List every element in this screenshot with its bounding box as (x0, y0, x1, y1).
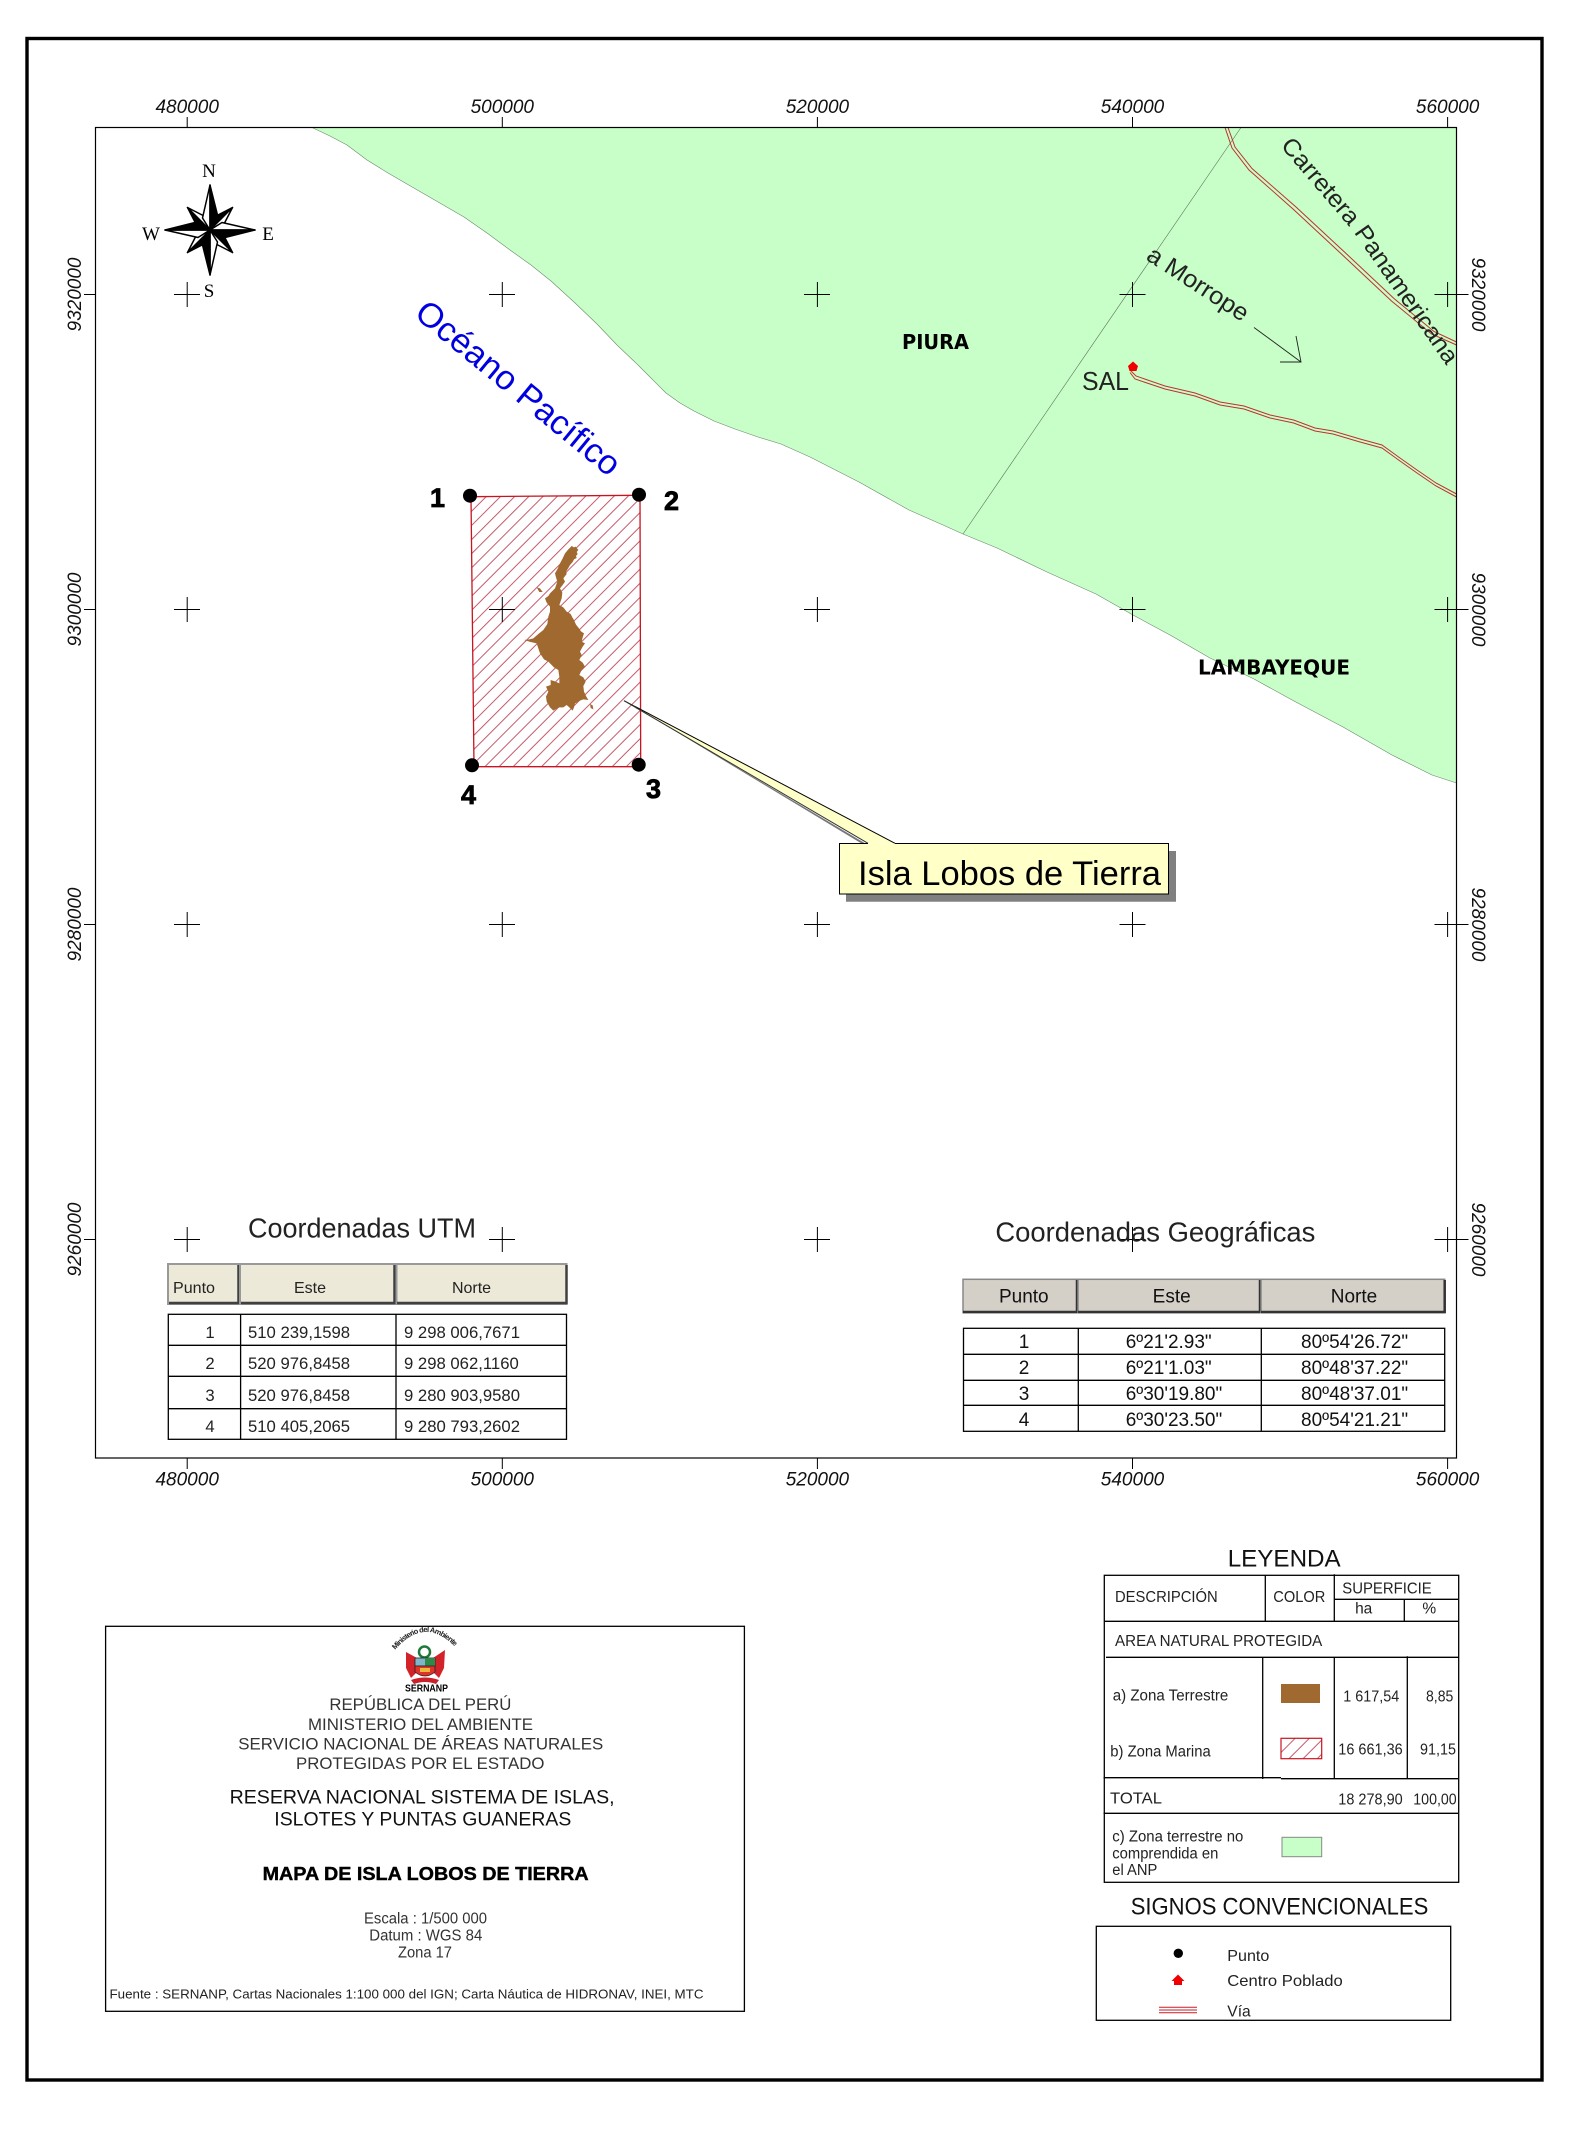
table rows: 6º30'23.50" (1126, 1410, 1222, 1431)
bottom axis labels: 540000 (1101, 1470, 1165, 1490)
row: zona terrestre no comprendida: el ANP (1112, 1862, 1157, 1879)
table rows: 6º21'1.03" (1126, 1358, 1212, 1379)
table rows: 510 405,2065 (248, 1417, 350, 1436)
table header: Norte (1331, 1287, 1377, 1308)
icon: compass rose: E (262, 224, 274, 245)
top axis labels: 520000 (786, 97, 850, 118)
panel: title block (104, 1626, 746, 2012)
legend heading: LEYENDA (1228, 1546, 1341, 1573)
table rows: 4 (1019, 1410, 1030, 1431)
arrow to Morrope (1254, 328, 1301, 362)
table rows: 9 298 062,1160 (404, 1354, 519, 1373)
island: Isla Lobos de Tierra (524, 546, 593, 711)
table rows: 3 (1019, 1384, 1029, 1405)
table rows: 80º48'37.22" (1301, 1358, 1408, 1379)
label: LAMBAYEQUE: LAMBAYEQUE (1198, 656, 1350, 680)
map title: MAPA DE ISLA LOBOS DE TIERRA (263, 1864, 589, 1884)
panel: signos convencionales (1096, 1893, 1451, 2021)
table header (963, 1279, 1445, 1313)
legend headers: DESCRIPCIÓN (1115, 1589, 1218, 1606)
legend headers: AREA NATURAL PROTEGIDA (1115, 1633, 1323, 1650)
left axis labels: 9320000 (65, 257, 86, 331)
row: zona terrestre no comprendida: c) Zona terrestre no (1112, 1829, 1243, 1846)
label: SAL: SAL (1082, 366, 1129, 396)
row: zona terrestre no comprendida: comprendida en (1112, 1845, 1218, 1862)
table rows: 520 976,8458 (248, 1386, 350, 1405)
right axis labels (1467, 258, 1488, 1277)
table rows: 80º54'26.72" (1301, 1332, 1408, 1353)
table rows: 2 (205, 1354, 215, 1373)
top axis labels: 540000 (1101, 97, 1165, 118)
legend headers (1115, 1580, 1436, 1650)
institution text: PROTEGIDAS POR EL ESTADO (296, 1754, 544, 1773)
coordinate crosshairs (174, 282, 1468, 1252)
symbol: via (1159, 2004, 1251, 2021)
table rows (964, 1328, 1445, 1431)
row: Zona Terrestre: a) Zona Terrestre (1113, 1688, 1228, 1705)
table rows: 9 298 006,7671 (404, 1323, 520, 1342)
panel: legend (1104, 1546, 1459, 1882)
label: Carretera Panamericana: Carretera Panamericana (1284, 139, 1454, 366)
scale and datum (364, 1910, 487, 1961)
bottom axis labels: 480000 (155, 1470, 219, 1490)
row: total: TOTAL (1110, 1790, 1162, 1807)
table rows: 9 280 793,2602 (404, 1417, 520, 1436)
left axis labels (65, 257, 86, 1276)
row: Zona Terrestre: 1 617,54 (1343, 1688, 1400, 1705)
table header: Norte (452, 1280, 491, 1297)
small crosshair over marine zone (489, 597, 515, 622)
scale and datum: Datum : WGS 84 (369, 1928, 483, 1945)
land area: Piura and Lambayeque (312, 128, 1456, 783)
bottom axis labels: 560000 (1416, 1470, 1480, 1490)
row: zona terrestre no comprendida (1112, 1829, 1322, 1879)
icon: SERNANP coat of arms logo: Ministerio del Ambiente (392, 1627, 456, 1650)
row: Zona Marina: b) Zona Marina (1110, 1744, 1211, 1761)
left axis labels: 9260000 (65, 1202, 86, 1276)
map neatline (96, 128, 1456, 1458)
road to SAL (1130, 370, 1456, 497)
top axis labels: 500000 (471, 97, 534, 118)
row: total: 18 278,90 (1338, 1791, 1403, 1808)
table rows: 3 (205, 1386, 215, 1405)
point numbers: 3 (646, 774, 661, 804)
table rows: 2 (1019, 1358, 1029, 1379)
scale and datum: Zona 17 (398, 1944, 452, 1961)
point numbers: 1 (430, 483, 445, 513)
point numbers: 2 (664, 486, 679, 516)
table rows: 80º54'21.21" (1301, 1410, 1408, 1431)
table rows: 4 (205, 1417, 215, 1436)
top axis labels (155, 97, 1480, 118)
symbol: punto (1174, 1948, 1269, 1965)
institution text: REPÚBLICA DEL PERÚ (329, 1695, 511, 1714)
point numbers: 4 (461, 780, 476, 810)
left axis labels: 9280000 (65, 887, 86, 961)
row: total (1110, 1790, 1457, 1808)
label: PIURA: PIURA (902, 330, 970, 354)
bottom axis labels: 500000 (471, 1470, 534, 1490)
institution text (238, 1695, 603, 1773)
heading: Coordenadas Geográficas (995, 1217, 1315, 1248)
table rows: 6º30'19.80" (1126, 1384, 1222, 1405)
legend headers: SUPERFICIE (1342, 1580, 1432, 1597)
legend headers: ha (1355, 1600, 1373, 1617)
table rows: 80º48'37.01" (1301, 1384, 1408, 1405)
panel: map (65, 97, 1488, 1490)
symbol: via: Vía (1227, 2004, 1251, 2021)
table header (168, 1264, 566, 1304)
row: Zona Marina: 16 661,36 (1338, 1741, 1403, 1758)
right axis labels: 9300000 (1467, 573, 1488, 647)
row: Zona Marina: 91,15 (1420, 1741, 1456, 1758)
callout: Isla Lobos de Tierra (624, 701, 1176, 902)
panel: Coordenadas Geográficas table (963, 1217, 1445, 1431)
table rows: 1 (205, 1323, 215, 1342)
marker: SAL town (1128, 362, 1138, 371)
icon: SERNANP coat of arms logo: SERNANP (405, 1684, 448, 1695)
label: a Morrope: a Morrope (1142, 241, 1254, 327)
top axis labels: 480000 (155, 97, 219, 118)
left axis labels: 9300000 (65, 572, 86, 646)
symbol: punto: Punto (1227, 1948, 1269, 1965)
table rows: 510 239,1598 (248, 1323, 350, 1342)
scale and datum: Escala : 1/500 000 (364, 1910, 487, 1927)
table rows (168, 1314, 567, 1439)
label: Océano Pacífico: Océano Pacífico (408, 293, 628, 484)
marine zone hatched rectangle (471, 495, 641, 767)
point numbers (430, 483, 679, 810)
legend grid (1104, 1574, 1459, 1882)
bottom axis labels (155, 1470, 1480, 1490)
symbol: centro poblado: Centro Poblado (1227, 1973, 1343, 1990)
right axis labels: 9320000 (1467, 258, 1488, 332)
table header: Punto (173, 1280, 215, 1297)
control points (463, 488, 646, 772)
icon: SERNANP coat of arms logo (392, 1627, 456, 1695)
panel: Coordenadas UTM table (168, 1213, 566, 1439)
right axis labels: 9280000 (1467, 888, 1488, 962)
department boundary (963, 128, 1241, 534)
icon: compass rose: W (142, 224, 160, 245)
reserve name: RESERVA NACIONAL SISTEMA DE ISLAS, (230, 1786, 615, 1808)
heading: Coordenadas UTM (248, 1213, 476, 1244)
institution text: SERVICIO NACIONAL DE ÁREAS NATURALES (238, 1734, 603, 1753)
row: Zona Marina (1110, 1738, 1456, 1761)
top axis labels: 560000 (1416, 97, 1480, 118)
row: Zona Terrestre: 8,85 (1426, 1688, 1453, 1705)
row: total: 100,00 (1413, 1791, 1457, 1808)
table rows: 1 (1019, 1332, 1029, 1353)
icon: compass rose (142, 161, 274, 302)
reserve name: ISLOTES Y PUNTAS GUANERAS (274, 1809, 571, 1831)
reserve name (230, 1786, 615, 1831)
table rows: 6º21'2.93" (1126, 1332, 1212, 1353)
table rows: 9 280 903,9580 (404, 1386, 520, 1405)
heading: SIGNOS CONVENCIONALES (1131, 1893, 1428, 1920)
institution text: MINISTERIO DEL AMBIENTE (308, 1715, 533, 1734)
axis ticks (84, 117, 1468, 1469)
callout: Isla Lobos de Tierra: Isla Lobos de Tierra (858, 855, 1162, 893)
road: Carretera Panamericana (1225, 128, 1456, 345)
icon: compass rose: S (204, 281, 214, 302)
table header: Este (1153, 1287, 1191, 1308)
icon: compass rose: N (202, 161, 216, 182)
table header: Este (294, 1280, 326, 1297)
legend headers: % (1422, 1600, 1436, 1617)
source line: Fuente : SERNANP, Cartas Nacionales 1:100 000 del IGN; Carta Náutica de HIDRONAV, INEI, MTC (110, 1986, 704, 2001)
table header: Punto (999, 1287, 1049, 1308)
symbol: centro poblado (1172, 1973, 1343, 1990)
table rows: 520 976,8458 (248, 1354, 350, 1373)
bottom axis labels: 520000 (786, 1470, 850, 1490)
legend headers: COLOR (1273, 1589, 1325, 1606)
row: Zona Terrestre (1113, 1684, 1453, 1705)
right axis labels: 9260000 (1467, 1203, 1488, 1277)
